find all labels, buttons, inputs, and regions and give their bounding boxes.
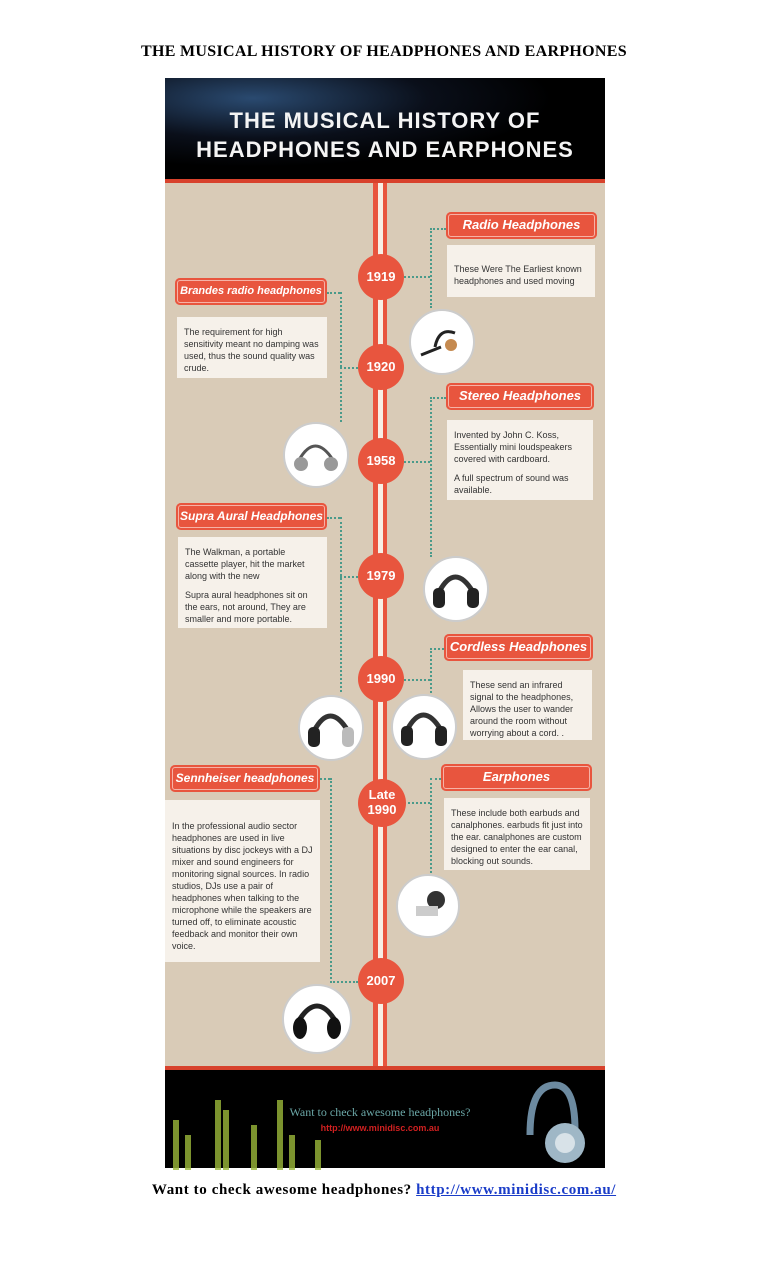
icon: 2007 headphones <box>282 984 352 1054</box>
text: stereo <box>447 420 593 500</box>
header title: THE MUSICAL HISTORY OF <box>230 108 540 133</box>
year: 1919: 1919 <box>367 269 395 284</box>
year: 1990: 1990 <box>367 671 395 686</box>
text: radio <box>447 245 595 297</box>
label: Sennheiser: Sennheiser headphones <box>176 771 314 785</box>
label: Brandes <box>175 278 327 305</box>
footer call to action: http://www.minidisc.com.au <box>321 1123 439 1133</box>
year: Late 1990: 1990 <box>368 802 396 817</box>
footer equalizer <box>173 1100 321 1170</box>
year: 1979 <box>358 553 404 599</box>
footer call to action: Want to check awesome headphones? <box>290 1105 470 1119</box>
year: 2007 <box>358 958 404 1004</box>
year: 1958: 1958 <box>367 453 395 468</box>
label: Supra Aural <box>176 503 327 530</box>
year: 1958 <box>358 438 404 484</box>
label: Radio Headphones <box>446 212 597 239</box>
text: brandes: The requirement for high sensitivity meant no damping was used, thus the sound quality was crude. <box>184 327 319 373</box>
label: Radio Headphones: Radio Headphones <box>463 217 580 232</box>
label: Cordless <box>444 634 593 661</box>
year: 1979: 1979 <box>367 568 395 583</box>
bottom caption: Want to check awesome headphones? http://www.minidisc.com.au/ <box>152 1182 616 1198</box>
icon: footer headphones <box>526 1082 585 1163</box>
icon: 1919 headphones <box>409 309 475 375</box>
text: sennheiser: In the professional audio sector headphones are used in live situations by disc jockeys with a DJ mixer and sound engineers for monitoring signal sources. In radio studios, DJs use a pair of headphones when talking to the microphone while the speakers are turned off, to eliminate acoustic feedback and monitor their own voice. <box>172 821 313 951</box>
year: 1920: 1920 <box>367 359 395 374</box>
year: 1990 <box>358 656 404 702</box>
text: stereo: Invented by John C. Koss, Essentially mini loudspeakers covered with cardboard. <box>454 430 572 464</box>
year: Late 1990 <box>358 779 406 827</box>
icon: 1990 headphones A <box>298 695 364 761</box>
text: supra aural: The Walkman, a portable cassette player, hit the market along with the new <box>185 547 305 581</box>
icon: earphones <box>396 874 460 938</box>
label: Sennheiser <box>170 765 320 792</box>
header title <box>196 108 574 162</box>
text: cordless <box>463 670 592 740</box>
year: 2007: 2007 <box>367 973 395 988</box>
text: cordless: These send an infrared signal to the headphones, Allows the user to wander around the room without worrying about a cord. . <box>470 680 573 738</box>
year: 1919 <box>358 254 404 300</box>
label: Earphones: Earphones <box>483 769 550 784</box>
timeline spine <box>373 183 387 1068</box>
text: radio: These Were The Earliest known headphones and used moving <box>454 264 582 286</box>
icon: 1979 headphones <box>423 556 489 622</box>
label: Supra Aural: Supra Aural Headphones <box>180 509 323 523</box>
text: earphones: These include both earbuds and canalphones. earbuds fit just into the ear. canalphones are custom designed to enter the ear canal, blocking out sounds. <box>451 808 583 866</box>
label: Stereo Headphones <box>446 383 594 410</box>
text: brandes <box>177 317 327 378</box>
footer call to action <box>290 1105 470 1133</box>
header title: HEADPHONES AND EARPHONES <box>196 137 574 162</box>
text: supra aural: Supra aural headphones sit on the ears, not around, They are smaller and more portable. <box>185 590 308 624</box>
infographic <box>165 78 605 1168</box>
year: Late 1990: Late <box>369 787 395 802</box>
text: stereo: A full spectrum of sound was available. <box>454 473 569 495</box>
label: Cordless: Cordless Headphones <box>450 639 587 654</box>
connectors <box>404 276 430 278</box>
text: supra aural <box>178 537 327 628</box>
footer banner <box>165 1066 605 1168</box>
header banner <box>165 78 605 183</box>
label: Stereo Headphones: Stereo Headphones <box>459 388 581 403</box>
year: 1920 <box>358 344 404 390</box>
icon: 1958 headphones <box>283 422 349 488</box>
icon: 1990 headphones B <box>391 694 457 760</box>
label: Brandes: Brandes radio headphones <box>180 285 322 297</box>
page title: THE MUSICAL HISTORY OF HEADPHONES AND EARPHONES <box>141 43 627 60</box>
label: Earphones <box>441 764 592 791</box>
